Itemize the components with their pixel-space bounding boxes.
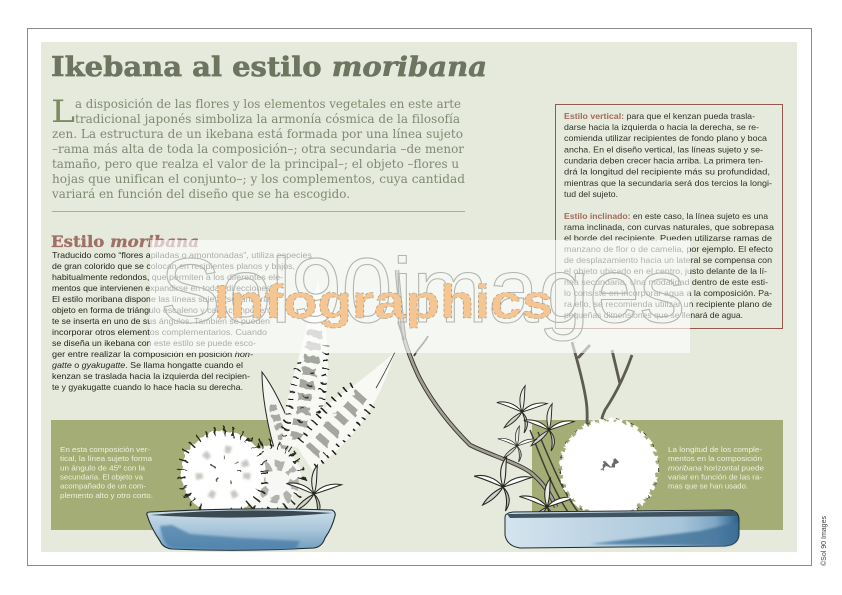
text: estilo inclinado: ra ello, se recomienda utilizar un recipiente plano de: [564, 299, 772, 309]
text: estilo vertical: darse hacia la izquierda o hacia la derecha, se re-: [564, 122, 759, 132]
text: estilo inclinado: nea secundaria. Una modalidad dentro de este esti-: [564, 277, 768, 287]
text: estilo inclinado: el borde del recipiente. Pueden utilizarse ramas de: [564, 233, 772, 243]
text: estilo inclinado: [564, 211, 774, 320]
caption left: secundaria. El objeto va: [60, 472, 144, 482]
caption left: un ángulo de 45º con la: [60, 464, 146, 472]
vase left: [147, 509, 335, 550]
stems: [530, 430, 578, 512]
flower front: [181, 431, 265, 515]
caption right: variar en función de las ra-: [668, 472, 763, 482]
text: estilo vertical: tud del sujeto.: [564, 189, 618, 199]
caption left: tical, la línea sujeto forma: [60, 454, 153, 463]
text: estilo vertical: cundaria deben crecer hacia arriba. La primera ten-: [564, 156, 763, 166]
text: estilo vertical: comienda utilizar recipientes de fondo plano y boca: [564, 133, 767, 143]
watermark band: [150, 240, 690, 353]
intro text block: –rama más alta de toda la composición–; otra secundaria –de menor: [52, 142, 464, 156]
text block: estilo moribana: kenzan se traslada hacia la izquierda del recipien-: [52, 371, 250, 381]
heading: Estilo moribana: Estilo moribana: [51, 232, 199, 251]
text: estilo vertical: Estilo vertical: para que el kenzan pueda trasla-: [564, 111, 755, 121]
title: Ikebana al estilo moribana: [51, 52, 487, 83]
spike left: [262, 372, 296, 465]
main branch: [397, 270, 556, 507]
caption right: mentos en la composición: [668, 454, 762, 463]
intro text block: [51, 94, 465, 201]
intro text block: a disposición de las flores y los elementos vegetales en este arte: [75, 97, 461, 111]
text: estilo inclinado: rama inclinada, con curvas naturales, que sobrepasa: [564, 222, 774, 232]
caption left: plemento alto y otro corto.: [60, 491, 153, 500]
illustration: right arrangement: [397, 270, 739, 548]
text block: estilo moribana: objeto en forma de triángulo escaleno y cada componen-: [52, 305, 272, 315]
credit: ©Sol 90 Images: [819, 516, 828, 566]
text: estilo vertical: ancha. En el diseño vertical, las líneas sujeto y se-: [564, 144, 763, 154]
text: estilo inclinado: manzano de flor o de camelia, por ejemplo. El efecto: [564, 244, 773, 254]
intro text block: variará en función del diseño que se ha escogido.: [51, 187, 350, 201]
panel: background: [41, 42, 797, 552]
flower white: [560, 418, 658, 518]
text block: estilo moribana: se diseña un ikebana con este estilo se puede esco-: [52, 338, 256, 348]
intro text block: tamaño, pero que realza el valor de la principal–; el objeto –flores u: [52, 157, 459, 171]
caption left: En esta composición ver-: [60, 445, 151, 454]
caption left: acompañado de un com-: [60, 482, 147, 491]
text block: estilo moribana: Traducido como “flores apiladas o amontonadas”, utiliza especies: [52, 250, 312, 260]
text block: estilo moribana: El estilo moribana dispone las líneas sujeto, secundaria y: [52, 294, 278, 304]
green band left: [51, 420, 271, 530]
twig: [398, 322, 428, 356]
flower behind: [234, 444, 302, 512]
green band right: [532, 420, 783, 530]
caption right: moribana horizontal puede: [668, 464, 764, 472]
caption right: [668, 445, 764, 491]
intro text block: tradicional japonés simboliza la armonía cósmica de la filosofía: [75, 112, 460, 126]
spike tall: [282, 280, 328, 450]
text block: estilo moribana: ger entre realizar la composición en posición hon-: [52, 349, 253, 359]
text block: estilo moribana: te se inserta en uno de sus ángulos. También se pueden: [52, 316, 270, 326]
text block: estilo moribana: mentos que intervienen expandirse en todas direcciones.: [52, 283, 273, 293]
text: estilo inclinado: Estilo inclinado: en este caso, la línea sujeto es una: [564, 211, 768, 221]
text: estilo vertical: drá la longitud del recipiente más su profundidad,: [564, 166, 770, 176]
text block: estilo moribana: te y gyakugatte cuando lo hace hacia su derecha.: [52, 382, 243, 392]
text block: estilo moribana: habitualmente redondos, que permiten a los diferentes ele-: [52, 272, 283, 282]
caption left: [60, 445, 153, 500]
vase right: [505, 510, 739, 548]
caption right: La longitud de los comple-: [668, 445, 763, 454]
watermark: infographics: Infographics: [214, 275, 553, 328]
text block: estilo moribana: de gran colorido que se colocan en recipientes planos y bajos,: [52, 261, 295, 271]
text: estilo vertical: mientras que la secundaria será dos tercios la longi-: [564, 178, 772, 188]
text: estilo vertical: [564, 111, 772, 199]
caption right: mas que se han usado.: [668, 482, 748, 491]
leaf cluster: [286, 465, 342, 517]
leaves: [474, 386, 575, 530]
spike right: [296, 352, 395, 470]
text: estilo inclinado: el objeto ubicado en el centro, justo delante de la lí-: [564, 266, 767, 276]
intro text block: hojas que unifican el conjunto–; y los complementos, cuya cantidad: [52, 172, 465, 186]
text: estilo inclinado: lo consiste en incorporar agua a la composición. Pa-: [564, 288, 772, 298]
text block: estilo moribana: [52, 250, 312, 392]
drop cap: L: [51, 94, 75, 130]
text block: estilo moribana: gatte o gyakugatte . Se llama hongatte cuando el: [52, 360, 243, 370]
branch upper right: [572, 342, 632, 440]
text: estilo inclinado: de desplazamiento hacia un lateral se compensa con: [564, 255, 772, 265]
illustration: left arrangement: [147, 280, 395, 550]
text: estilo inclinado: pequeñas dimensiones que se llenará de agua.: [564, 310, 743, 320]
text block: estilo moribana: incorporar otros elementos complementarios. Cuando: [52, 327, 267, 337]
panel: estilos vertical e inclinado: [556, 104, 782, 328]
intro text block: zen. La estructura de un ikebana está formada por una línea sujeto: [52, 127, 463, 141]
watermark: Sol90images: Sol90images: [160, 240, 685, 342]
